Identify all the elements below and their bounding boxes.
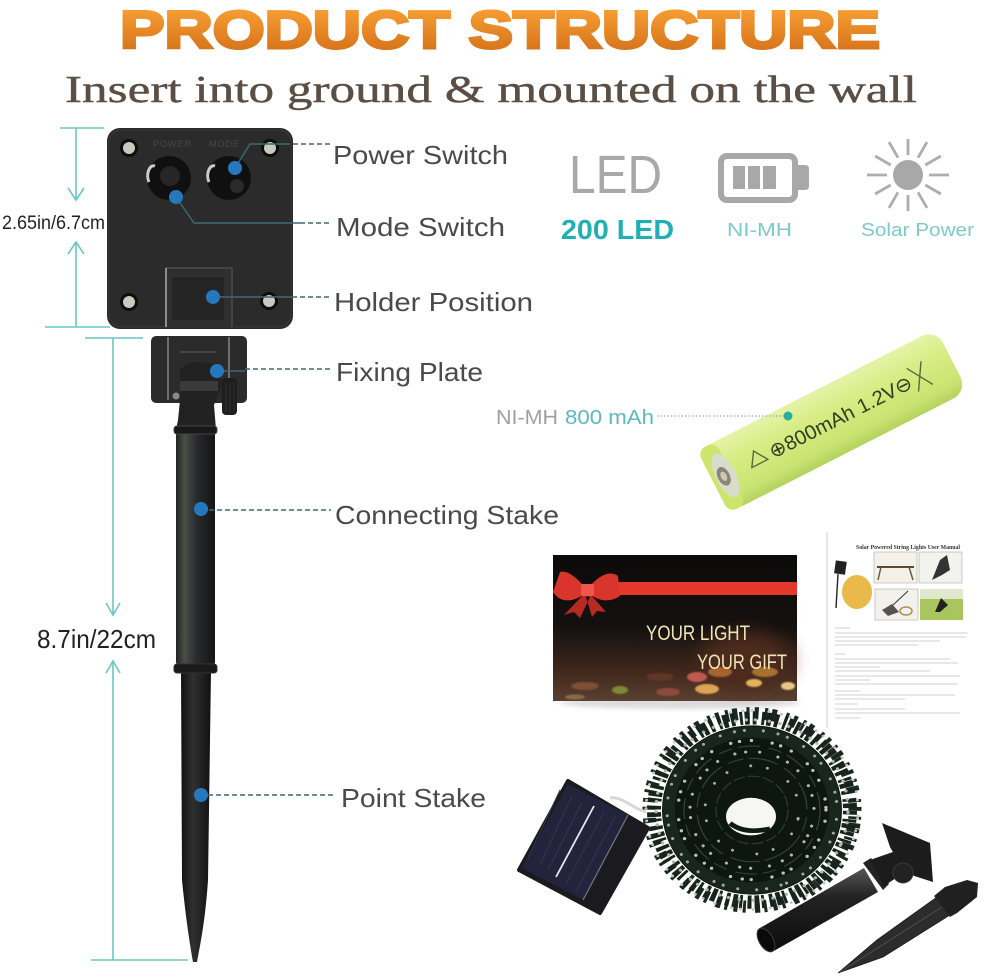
mode button: [207, 156, 251, 200]
icon: LED: LED: [569, 145, 662, 205]
battery capacity callout: NI-MH: [496, 407, 558, 429]
switch: mode label: MODE: [209, 139, 240, 149]
icon: sun: [861, 139, 974, 240]
battery capacity callout: [496, 407, 792, 429]
label: fixing plate: Fixing Plate: [336, 357, 483, 387]
switch: power label: POWER: [153, 139, 192, 149]
rechargeable battery: [697, 329, 968, 513]
bow: [553, 572, 620, 618]
warm glow: [700, 632, 790, 688]
manual text lines: [835, 628, 968, 718]
power button: [147, 156, 191, 200]
spare point stake: [838, 880, 978, 973]
subtitle: Insert into ground & mounted on the wall: [65, 69, 917, 111]
label: holder position: Holder Position: [334, 287, 533, 317]
solar panel: [519, 781, 648, 913]
icon: battery: [721, 156, 809, 240]
coil centre opening: [726, 798, 776, 835]
holder recess: [166, 268, 232, 327]
icon: sun: Solar Power: [861, 220, 974, 240]
dimension: 8.7in length: [37, 338, 188, 960]
part labels: [333, 140, 559, 813]
fixing plate and clamp: [151, 336, 247, 430]
icon: battery: NI-MH: [727, 220, 792, 240]
icon: LED: 200 LED: [561, 214, 674, 245]
callout leader lines: [176, 144, 336, 795]
user manual: Solar Powered String Lights User Manual: [856, 544, 960, 551]
label: point stake: Point Stake: [341, 783, 486, 813]
wire from panel to coil: [610, 798, 646, 812]
solar control box: [107, 128, 293, 329]
spare connecting stake: [753, 823, 933, 955]
label: mode switch: Mode Switch: [336, 212, 505, 242]
label: power switch: Power Switch: [333, 140, 508, 170]
screws: [120, 139, 279, 311]
callout dots: [169, 161, 242, 802]
battery capacity callout: 800 mAh: [565, 407, 654, 429]
bokeh lights: [565, 667, 795, 700]
gift box: [553, 555, 800, 709]
dimension: 2.65in height: [2, 128, 110, 327]
user manual: [827, 532, 968, 728]
label: connecting stake: Connecting Stake: [335, 500, 559, 530]
LED string light coil: [613, 680, 891, 940]
title: PRODUCT STRUCTURE: [120, 1, 880, 60]
gift box: YOUR GIFT: [697, 651, 787, 674]
manual photos: [834, 552, 963, 620]
rechargeable battery: ⊕800mAh 1.2V⊖: [766, 372, 916, 463]
dimension: 8.7in length: 8.7in/22cm: [37, 624, 156, 654]
ribbon: [618, 582, 797, 595]
connecting stake: [174, 426, 217, 664]
dimension: 2.65in height: 2.65in/6.7cm: [2, 213, 105, 234]
gift box: YOUR LIGHT: [646, 622, 750, 645]
icon: LED: [561, 145, 674, 245]
point stake: [174, 664, 217, 962]
